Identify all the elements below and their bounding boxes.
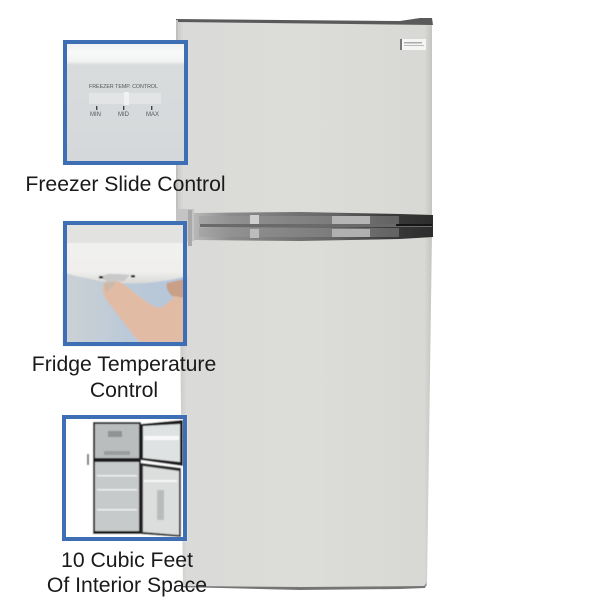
caption: interior space: Of Interior Space (47, 574, 207, 597)
freezer door (176, 18, 433, 218)
photo: control panel: FREEZER TEMP. CONTROL (89, 84, 158, 90)
refrigerator (176, 18, 433, 590)
photo: open refrigerator (62, 415, 187, 541)
caption: freezer slide control: Freezer Slide Control (25, 173, 226, 196)
photo: hand on dial (63, 221, 187, 346)
photo: control panel: MAX (146, 112, 159, 118)
caption: fridge temperature control: Control (90, 379, 158, 402)
panel: freezer slide control (63, 40, 188, 165)
caption: interior space: 10 Cubic Feet (61, 549, 193, 572)
photo: control panel (63, 40, 188, 165)
badge (400, 39, 426, 50)
panel: fridge temperature control (63, 221, 187, 346)
photo: control panel: MID (118, 112, 130, 118)
photo: control panel: MIN (90, 112, 101, 118)
caption: fridge temperature control: Fridge Temperature (32, 353, 216, 376)
fridge door (179, 232, 432, 590)
door handle (176, 209, 433, 246)
caption: interior space (47, 549, 207, 597)
panel: interior space (62, 415, 187, 541)
caption: fridge temperature control (32, 353, 216, 402)
